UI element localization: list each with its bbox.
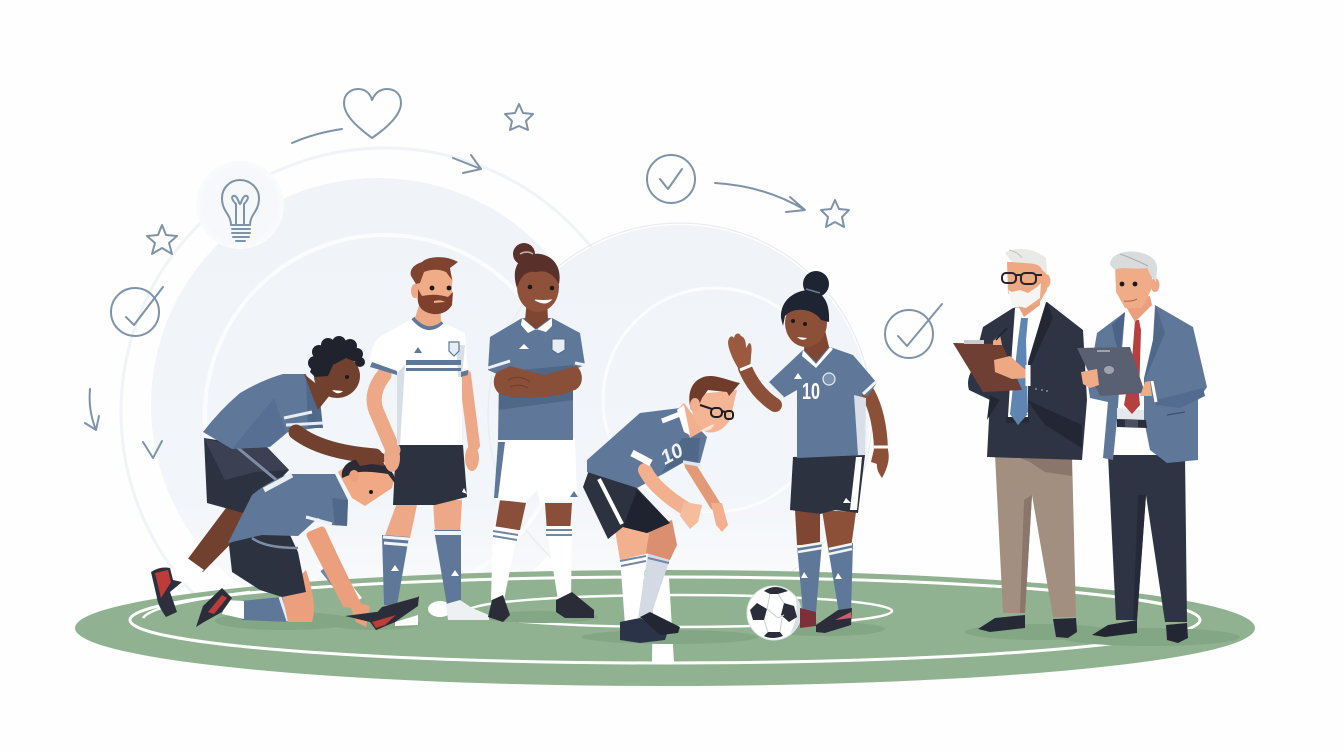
hand left [1081,369,1099,388]
icon: small check [143,441,162,458]
hair [411,257,458,284]
shoe left red black [370,597,418,630]
beard [418,289,453,314]
white shorts [495,438,577,502]
belt [1117,419,1147,428]
belt [1006,417,1029,423]
socks [382,530,461,605]
head [415,265,452,313]
coach: man with clipboard [953,249,1087,638]
shirt [488,318,585,440]
shorts [204,438,289,514]
white sock front [620,553,647,625]
blue tie [1010,318,1028,425]
football pitch [75,570,1255,686]
thighs [795,510,820,545]
white hair [1005,249,1047,274]
shorts [583,470,670,539]
shoes [978,615,1025,632]
legs [495,500,526,530]
collar [802,347,833,368]
icon: star top [505,104,533,130]
torso shirt [203,374,323,449]
jacket [968,302,1087,460]
collar and neck [677,403,704,438]
collar [521,318,552,333]
white shirt [1117,305,1155,420]
near arm [645,470,688,510]
raised hand [728,334,752,368]
player: crouching helper [151,336,386,617]
curved arrow right [715,183,805,212]
beige trousers [995,455,1076,617]
back shin with sock [240,597,290,622]
shoes [800,608,816,628]
blue jacket [1088,305,1207,463]
arrow down left [85,389,99,430]
icon: check circle right [885,304,942,358]
tablet [1077,347,1145,396]
head [1007,262,1047,307]
grey hair [1110,252,1157,282]
shorts [229,533,306,597]
reaching arm [310,530,358,605]
head [338,462,396,506]
white shoe patch [428,601,452,617]
knee [282,570,314,622]
player: woman number 10 [728,271,889,633]
shirt [587,408,707,488]
glasses [1002,273,1042,284]
player: kneeling tying boot [196,450,419,630]
shirt [370,318,468,445]
player: bearded man in white shirt [370,257,489,630]
hair [689,376,740,410]
player: woman with arms crossed [488,243,594,622]
arms [374,375,393,450]
shirt crest [823,373,835,385]
far arm [690,465,715,505]
navy trousers [1108,455,1187,622]
front boot [345,596,419,630]
shorts [393,445,467,505]
white socks [491,526,518,600]
hand right [1140,381,1152,396]
arrow right of ring [453,155,481,173]
shirt crest [449,342,459,356]
shoes [1092,620,1137,637]
clipboard [953,340,1022,392]
lapels [1144,306,1165,382]
head [690,390,737,432]
red tie [1124,320,1141,414]
right arm [868,393,881,450]
crossed arms [494,366,582,396]
shirt crest [552,339,565,354]
icon: check circle centre [647,155,695,203]
helper hand on head [352,450,385,466]
shorts [790,455,865,514]
thighs [384,500,418,538]
jacket cuff buttons [1035,389,1048,391]
white beard [1008,283,1041,308]
arm [296,432,375,456]
black shoes [488,595,510,622]
coach: man with tablet [1077,252,1207,643]
shirt [768,347,877,458]
raised arm [745,368,775,405]
thighs [615,510,650,560]
icon: light bulb [222,180,259,241]
glasses [700,405,733,419]
back leg [187,500,262,572]
boot back [151,568,182,617]
socks [797,542,822,612]
icon: check circle left [111,287,163,336]
eyes [430,286,434,290]
neck [804,330,829,362]
front sock [318,566,362,605]
boot rear [196,588,232,627]
player: man with glasses bending [583,376,740,643]
football [747,586,801,640]
head [517,262,559,312]
hair and bun [513,243,560,288]
shoes [620,618,667,643]
neck and head [304,374,330,410]
curly hair [308,336,365,377]
icon: heart [344,89,401,138]
outline icons [85,89,942,458]
white shirt [1008,302,1046,417]
number on shirt: 10 [657,440,687,469]
neck [1015,296,1040,317]
background circles [121,148,872,676]
shirt number: 10 [802,378,820,404]
dark hair [342,459,396,485]
hair and bun [781,271,829,326]
neck [525,300,548,329]
neck [1122,296,1152,322]
head [785,299,827,347]
head [1115,265,1153,308]
shirt [228,474,348,543]
arrow arc to heart [292,129,342,143]
icon: star left [147,225,177,254]
grey sock [638,553,670,618]
shoe right white [446,600,489,620]
icon: star right [821,200,849,227]
neck [415,300,441,326]
hands with pen [993,328,1028,386]
